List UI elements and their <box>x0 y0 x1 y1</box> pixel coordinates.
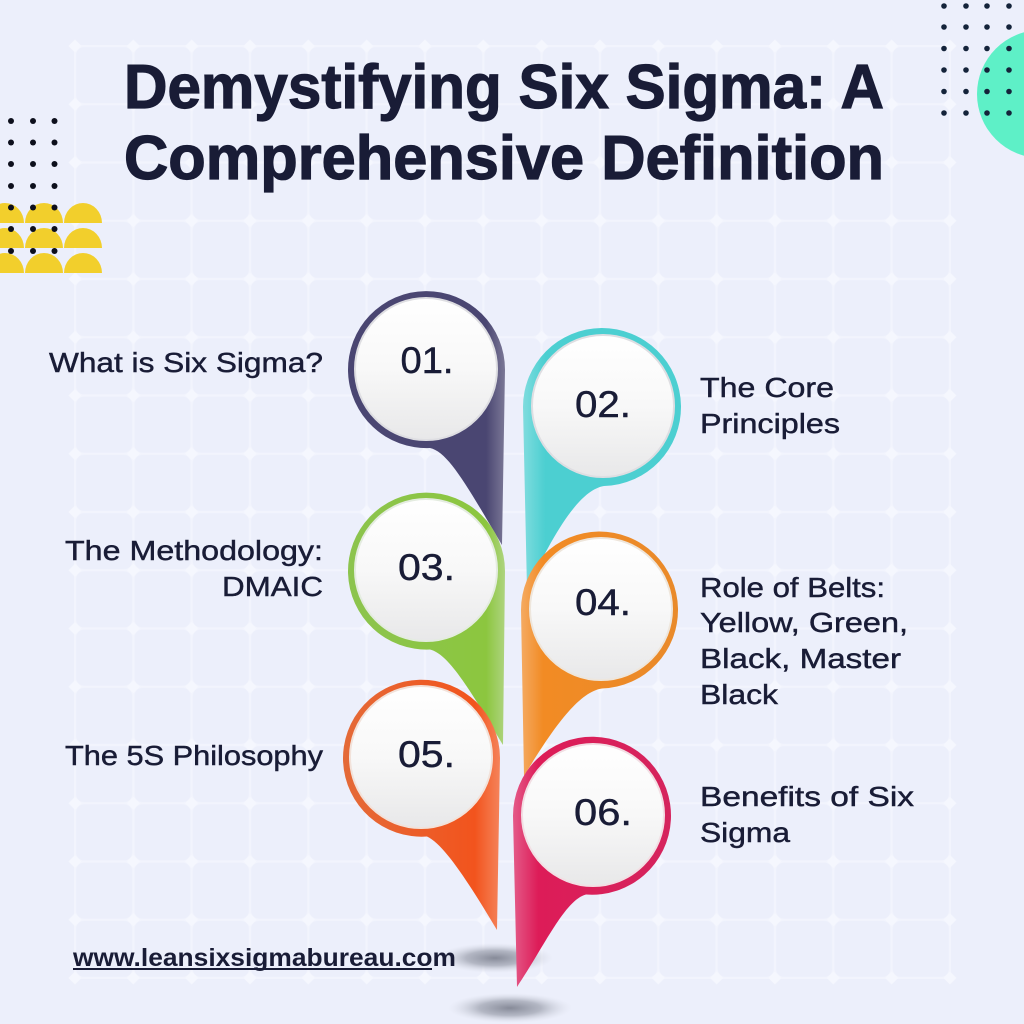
title <box>124 53 884 193</box>
label 06 <box>700 781 914 848</box>
shadow: upper pin <box>437 943 553 973</box>
pin 03: 03. <box>398 547 455 588</box>
label 01: What is Six Sigma? <box>49 347 323 378</box>
label 03 <box>65 535 323 602</box>
pin 01 <box>348 291 505 545</box>
pin 03 <box>348 493 505 745</box>
label 04: Role of Belts: <box>700 572 885 603</box>
pin 02 <box>523 328 681 590</box>
pin 05 <box>343 680 500 930</box>
label 04 <box>700 572 908 710</box>
label 03: DMAIC <box>222 571 323 602</box>
title: Comprehensive Definition <box>124 124 884 193</box>
label 04: Yellow, Green, <box>700 607 908 638</box>
decoration: mint circle <box>977 30 1024 158</box>
pin 04 <box>521 532 678 776</box>
label 04: Black, Master <box>700 643 901 674</box>
label 02: The Core <box>700 372 834 403</box>
pin 02: 02. <box>575 384 631 425</box>
label 06: Benefits of Six <box>700 781 914 812</box>
decoration: left dot grid <box>8 118 58 254</box>
decoration: yellow semicircles <box>0 203 102 273</box>
pin 01: 01. <box>400 340 454 381</box>
decoration: right dot grid <box>941 3 1012 116</box>
pin 06 <box>513 737 671 987</box>
pin 05: 05. <box>398 734 455 775</box>
label 03: The Methodology: <box>65 535 323 566</box>
label 02 <box>700 372 840 439</box>
label 02: Principles <box>700 408 840 439</box>
shadow: lower pin <box>448 993 572 1023</box>
pin 04: 04. <box>575 582 631 623</box>
label 04: Black <box>700 679 779 710</box>
pin 06: 06. <box>574 792 632 833</box>
title: Demystifying Six Sigma: A <box>124 53 884 122</box>
website link: www.leansixsigmabureau.com <box>72 944 456 972</box>
label 06: Sigma <box>700 817 790 848</box>
label 05: The 5S Philosophy <box>65 740 323 771</box>
